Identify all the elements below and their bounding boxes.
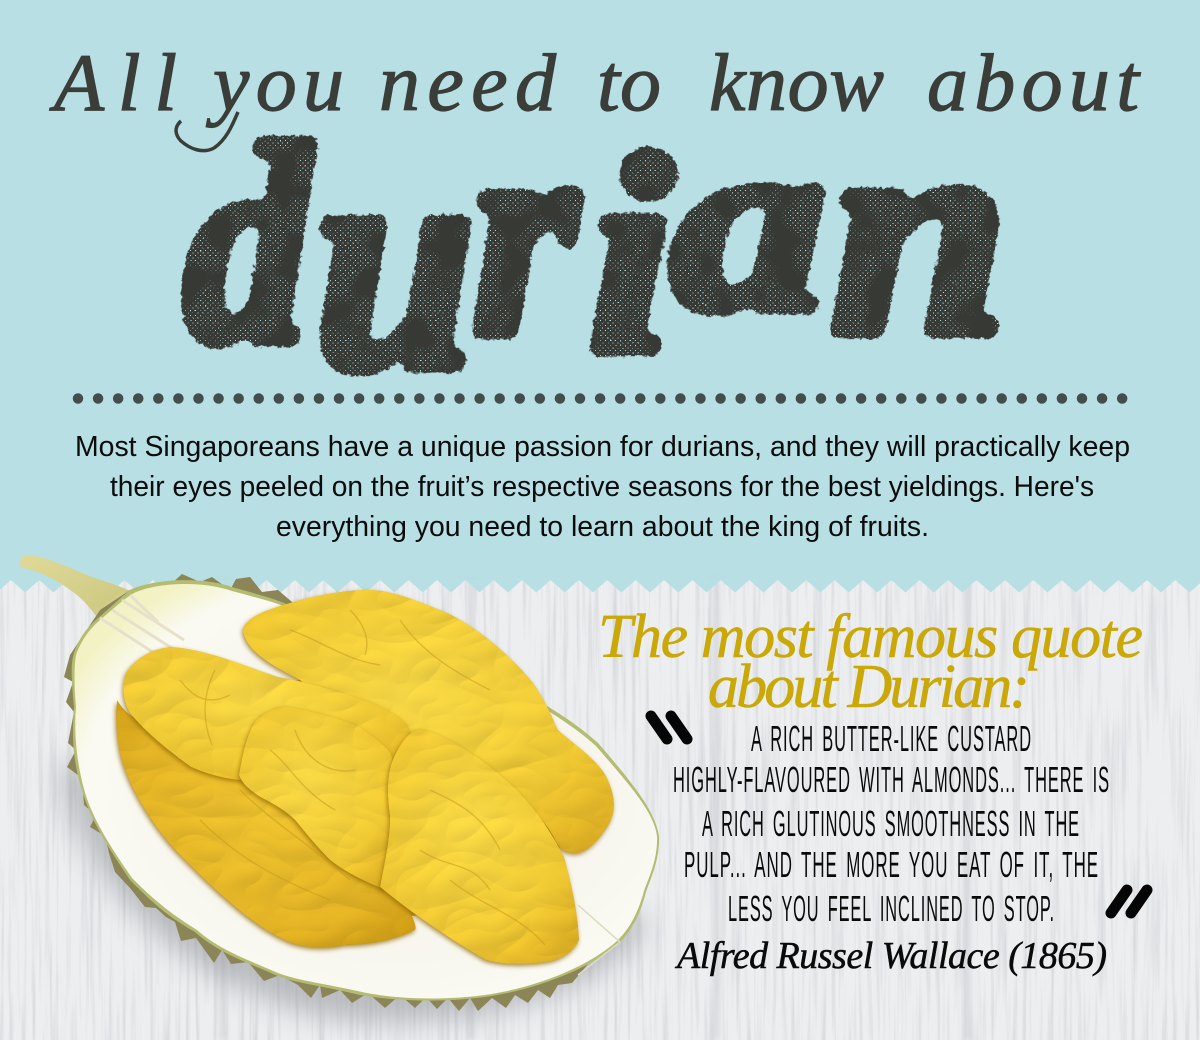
quote attribution: Alfred Russel Wallace (1865) — [674, 935, 1107, 977]
quote text — [673, 718, 1110, 929]
spikes — [64, 574, 600, 1011]
shadow under fruit — [60, 760, 650, 1022]
flesh lobe front — [380, 730, 579, 964]
title: All you need to know about: need — [379, 37, 557, 128]
title: All you need to know about — [49, 37, 1141, 151]
title: All you need to know about: you — [206, 37, 344, 128]
intro paragraph — [75, 431, 1130, 543]
flesh lobe left — [123, 647, 410, 780]
title: All you need to know about: to — [597, 37, 661, 128]
title: All you need to know about: about — [927, 37, 1141, 128]
husk flesh — [74, 584, 657, 999]
dotted divider — [78, 393, 1130, 404]
intro paragraph: everything you need to learn about the king of fruits. — [276, 511, 929, 543]
flesh lobe center — [239, 707, 397, 890]
heading: the most famous quote about durian: The most famous quote — [598, 603, 1143, 671]
durian fruit image — [20, 556, 659, 1022]
stem — [20, 556, 150, 640]
title word: durian: n — [830, 65, 1009, 398]
title word: durian: r — [472, 66, 582, 398]
flesh lobe top — [243, 590, 614, 853]
heading: the most famous quote about durian — [598, 603, 1143, 721]
intro paragraph: Most Singaporeans have a unique passion for durians, and they will practically keep — [75, 431, 1130, 463]
title word: durian: d — [184, 87, 313, 403]
heading: the most famous quote about durian: about Durian: — [708, 653, 1030, 721]
title word: durian: u — [315, 86, 475, 435]
title: All you need to know about: know — [709, 37, 884, 128]
title word: durian — [184, 65, 1009, 435]
title word: durian: i — [588, 97, 674, 412]
icon: opening quote mark — [651, 716, 687, 739]
flesh creases — [180, 610, 545, 945]
flesh lobe lower left — [116, 700, 416, 948]
zigzag edge — [0, 580, 1200, 593]
title word: durian: a — [671, 82, 826, 363]
flesh base — [135, 640, 590, 945]
intro paragraph: their eyes peeled on the fruit’s respective seasons for the best yieldings. Here's — [110, 471, 1094, 503]
fold in pulp — [578, 905, 620, 975]
husk rim — [72, 580, 659, 1001]
title: All you need to know about: All — [49, 37, 177, 128]
icon: closing quote mark — [1111, 890, 1147, 913]
fibres near stem — [100, 595, 184, 660]
background: white wood planks — [0, 580, 1200, 1040]
